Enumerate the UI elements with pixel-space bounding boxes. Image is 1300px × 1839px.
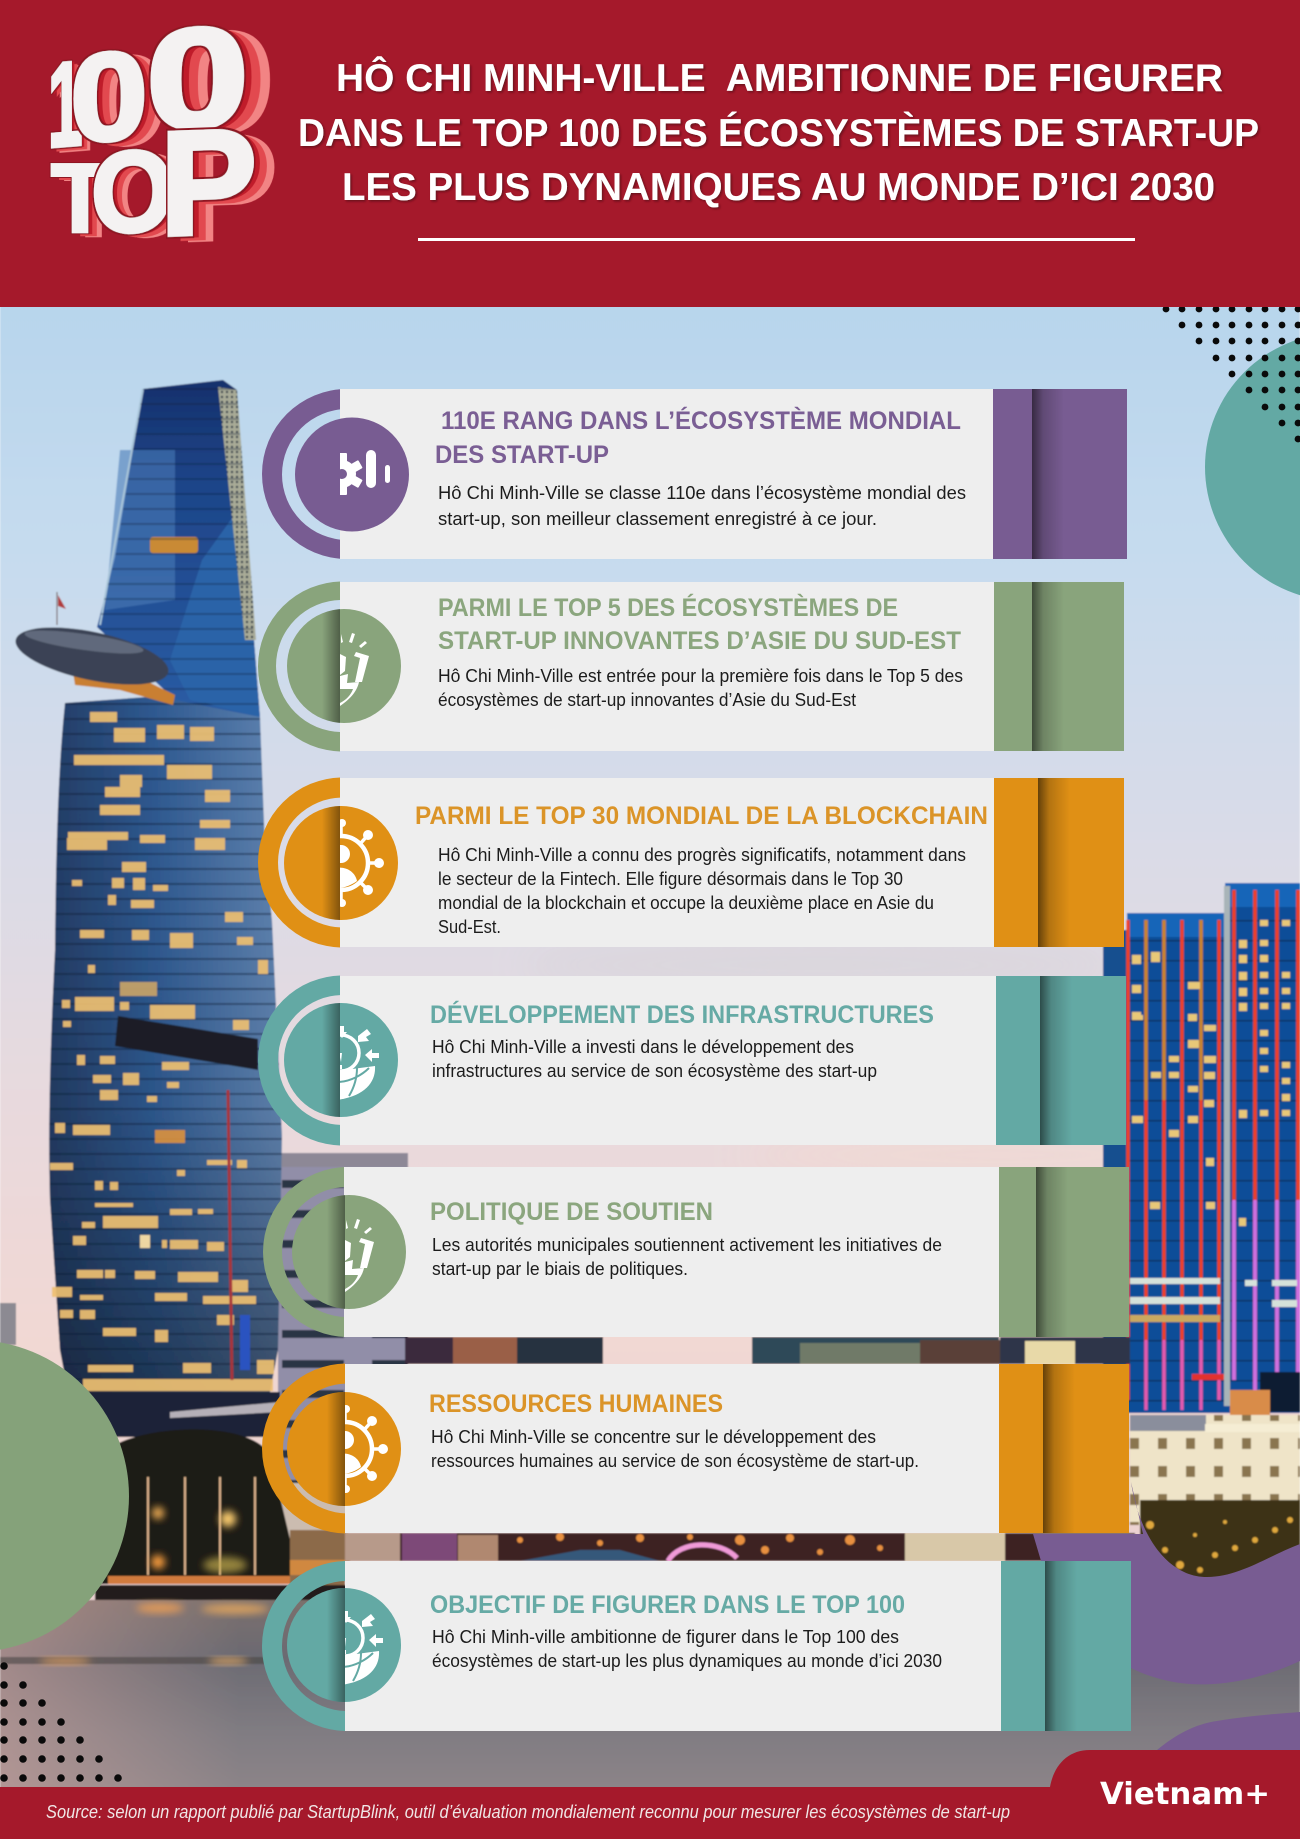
gray office building (0, 1153, 408, 1563)
icon: network virus (287, 1392, 401, 1506)
helipad (11, 616, 173, 696)
header banner (0, 0, 1300, 307)
tower shaft (49, 695, 282, 1392)
decorative blob: purple bottom right (1033, 1482, 1300, 1755)
footer bar with logo tab (0, 1750, 1300, 1839)
body text (438, 483, 966, 529)
Bitexco tower (11, 380, 282, 1392)
card body (344, 1167, 999, 1337)
heading: DÉVELOPPEMENT DES INFRASTRUCTURES (430, 1000, 934, 1029)
ring (262, 1561, 345, 1731)
body text: Hô Chi Minh-Ville est entrée pour la première fois dans le Top 5 des (438, 666, 963, 686)
dot pattern: top right (1163, 306, 1300, 442)
panel: infrastructures (258, 975, 1126, 1146)
body text: écosystèmes de start-up innovantes d’Asie du Sud-Est (438, 690, 856, 710)
body text: Hô Chi Minh-Ville se concentre sur le développement des (431, 1427, 876, 1447)
side stripe (999, 1167, 1129, 1337)
decorative circle: green left (0, 1340, 129, 1652)
icon: globe (284, 1003, 398, 1117)
icon: 3D 100 TOP logo: P (160, 98, 257, 267)
icon: shield and paper (287, 609, 401, 723)
body text: écosystèmes de start-up les plus dynamiques au monde d’ici 2030 (432, 1651, 942, 1671)
ring (258, 582, 340, 752)
heading (435, 406, 961, 469)
heading (438, 593, 961, 655)
ring (263, 1167, 344, 1337)
footer (0, 1750, 1300, 1839)
sky (0, 300, 1300, 1600)
ring (258, 778, 340, 948)
orange windows under helipad (73, 668, 175, 705)
body text: Hô Chi Minh-Ville a investi dans le développement des (432, 1037, 854, 1057)
decorative circle: teal top right (1205, 333, 1300, 601)
side stripe (994, 582, 1124, 751)
icon: 3D 100 TOP logo: T (51, 145, 109, 253)
heading: POLITIQUE DE SOUTIEN (430, 1198, 713, 1226)
source note: Source: selon un rapport publié par StartupBlink, outil d’évaluation mondialement reconnu pour mesurer les écosystèmes de start-up (46, 1802, 1010, 1822)
body text (432, 1235, 942, 1279)
heading: DES START-UP (435, 441, 609, 469)
title: LES PLUS DYNAMIQUES AU MONDE D’ICI 2030 (342, 166, 1215, 209)
black gap band (115, 1016, 258, 1070)
side stripe (1001, 1561, 1131, 1731)
colonial hotel and trees at right (1130, 1415, 1300, 1585)
heading: PARMI LE TOP 30 MONDIAL DE LA BLOCKCHAIN (415, 802, 988, 830)
trees and shoreline (85, 1392, 355, 1602)
body text: le secteur de la Fintech. Elle figure désormais dans le Top 30 (438, 869, 903, 889)
tower crown (97, 380, 260, 717)
card body (340, 976, 996, 1145)
icon: 3D 100 TOP logo: 0 (146, 0, 249, 160)
heading: PARMI LE TOP 5 DES ÉCOSYSTÈMES DE (438, 593, 898, 622)
icon: gear and sound bars (295, 418, 409, 532)
skyline strip between cards (345, 1337, 1135, 1561)
body text (432, 1627, 942, 1671)
body text: Hô Chi Minh-ville ambitionne de figurer dans le Top 100 des (432, 1627, 899, 1647)
title: HÔ CHI MINH-VILLE AMBITIONNE DE FIGURER (336, 55, 1223, 100)
side stripe (999, 1364, 1129, 1533)
card body (340, 778, 994, 947)
side stripe (996, 976, 1126, 1145)
ring (262, 389, 340, 559)
icon: 3D 100 TOP logo: 0 (70, 26, 148, 169)
side stripe (994, 778, 1124, 947)
card body (345, 1364, 999, 1533)
card body (340, 389, 993, 559)
body text: start-up, son meilleur classement enregistré à ce jour. (438, 509, 877, 529)
river (0, 1600, 1300, 1790)
body text (438, 666, 963, 710)
heading: OBJECTIF DE FIGURER DANS LE TOP 100 (430, 1591, 905, 1619)
panel: objectif top 100 (262, 1561, 1131, 1731)
heading: RESSOURCES HUMAINES (429, 1390, 723, 1418)
icon: 3D 100 TOP logo: O (91, 125, 174, 258)
body text: Hô Chi Minh-Ville se classe 110e dans l’écosystème mondial des (438, 483, 966, 503)
title (298, 55, 1259, 209)
card body (340, 582, 994, 751)
body text: Les autorités municipales soutiennent activement les initiatives de (432, 1235, 942, 1255)
flag (56, 592, 58, 625)
panel: top 5 Asie du Sud-Est (258, 581, 1124, 752)
ring (262, 1364, 345, 1534)
lit windows (50, 712, 274, 1391)
panel: politique de soutien (263, 1167, 1129, 1337)
panel: top 30 blockchain (258, 777, 1124, 948)
icon: globe (287, 1588, 401, 1702)
logo: Vietnam+: Vietnam+ (1100, 1777, 1270, 1812)
heading: 110E RANG DANS L’ÉCOSYSTÈME MONDIAL (441, 406, 961, 435)
icon: shield and paper (292, 1195, 406, 1309)
side stripe (993, 389, 1127, 559)
icon: 3D 100 TOP logo (48, 0, 257, 267)
body text: mondial de la blockchain et occupe la deuxième place en Asie du (438, 893, 934, 913)
ring (258, 976, 340, 1146)
panel: 110e rang (262, 389, 1127, 559)
title underline (418, 238, 1135, 241)
body text (431, 1427, 919, 1471)
body text: infrastructures au service de son écosystème des start-up (432, 1061, 877, 1081)
body text: Sud-Est. (438, 917, 501, 937)
panel: ressources humaines (262, 1364, 1129, 1534)
card body (345, 1561, 1001, 1731)
icon: network virus (284, 806, 398, 920)
icon: 3D 100 TOP logo: 1 (48, 36, 82, 173)
body text: Hô Chi Minh-Ville a connu des progrès significatifs, notamment dans (438, 845, 966, 865)
title: DANS LE TOP 100 DES ÉCOSYSTÈMES DE START-UP (298, 111, 1259, 155)
dot pattern: bottom left (0, 1662, 122, 1782)
body text (432, 1037, 877, 1081)
heading: START-UP INNOVANTES D’ASIE DU SUD-EST (438, 627, 961, 655)
right towers (1103, 883, 1300, 1415)
body text (438, 845, 966, 937)
body text: ressources humaines au service de son écosystème de start-up. (431, 1451, 919, 1471)
body text: start-up par le biais de politiques. (432, 1259, 688, 1279)
